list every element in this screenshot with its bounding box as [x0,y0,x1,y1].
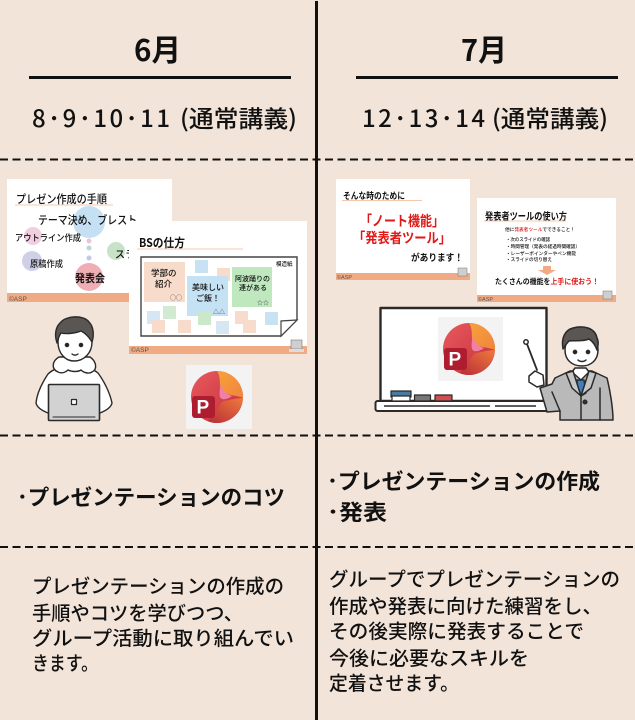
slide: brainstorming method: △△ [213,307,225,316]
illustration: presenter with pointer [524,327,613,420]
July description: グループでプレゼンテーションの [329,563,620,592]
slide: notes and presenter tools: 「ノート機能」 [360,211,444,231]
June topic: ･プレゼンテーションのコツ [17,481,285,512]
June description: 手順やコツを学びつつ、 [32,597,243,626]
slide: brainstorming method: ご飯！ [196,293,220,304]
slide: brainstorming method [129,221,307,354]
slide: presentation creation steps [7,179,172,303]
slide: notes and presenter tools: 「発表者ツール」 [353,228,451,248]
slide: how to use presenter tools: たくさんの機能を上手に使おう！ [495,276,599,287]
July description: 定着させます。 [329,667,459,696]
slide: how to use presenter tools: ©ASP [478,296,493,303]
slide: presentation creation steps: アウトライン作成 [15,231,81,244]
slide: how to use presenter tools: ・次のスライドの確認 [506,236,550,243]
icon: PowerPoint logo [186,365,252,429]
July description: 作成や発表に向けた練習をし、 [329,590,602,619]
slide: brainstorming method: ☆☆ [257,298,269,307]
June description: プレゼンテーションの作成の [32,570,284,599]
illustration: whiteboard [376,308,552,411]
July description: 今後に必要なスキルを [329,642,529,671]
slide: brainstorming method: 学部の [151,267,177,279]
June description: グループ活動に取り組んでい [32,622,294,651]
June description: きます。 [32,647,98,676]
slide: how to use presenter tools: ・スライドの切り替え [506,256,552,263]
slide: presentation creation steps: スラ [115,246,135,261]
slide: how to use presenter tools: 発表者ツールの使い方 [485,208,567,223]
heading: June: 6月 [134,26,181,70]
slide: how to use presenter tools [477,198,616,303]
slide: how to use presenter tools: ・時間管理（発表の経過時間確認） [506,243,580,250]
slide: brainstorming method: BSの仕方 [139,234,185,251]
heading: July [356,26,618,79]
slide: presentation creation steps: 発表会 [75,270,105,286]
slide: brainstorming method: ○○ [170,293,182,302]
June session numbers [32,99,297,134]
July description: その後実際に発表することで [329,615,584,644]
illustration: person at laptop [36,317,112,420]
July session numbers: (通常講義) [492,100,608,134]
slide: how to use presenter tools: ・レーザーポインターやペン機能 [506,250,576,257]
slide: notes and presenter tools: そんな時のために [343,189,405,202]
July topics [327,465,600,527]
June description [32,570,294,676]
icon: PowerPoint logo: P [196,398,210,418]
slide: notes and presenter tools [336,179,470,281]
column divider [315,1,318,720]
slide: presentation creation steps: 原稿作成 [30,257,63,270]
slide: brainstorming method: 紹介 [155,278,173,290]
slide: notes and presenter tools: があります！ [411,250,463,264]
slide: notes and presenter tools: ©ASP [337,274,352,281]
slide: presentation creation steps: プレゼン作成の手順 [16,191,107,207]
June session numbers: 8･9･10･11 [32,99,170,134]
slide: brainstorming method: 連がある [239,283,267,293]
slide: brainstorming method: 美味しい [192,282,224,293]
slide: presentation creation steps: テーマ決め、ブレスト [38,212,137,228]
icon: PowerPoint logo on whiteboard [438,317,503,381]
slide: how to use presenter tools: 他に発表者ツールでできること！ [505,226,575,233]
July session numbers: 12･13･14 [362,99,485,134]
slide: brainstorming method: 模造紙 [276,260,293,268]
icon: PowerPoint logo on whiteboard: P [448,350,462,370]
slide: brainstorming method: 阿波踊りの [235,274,270,284]
June session numbers: (通常講義) [180,100,297,134]
July session numbers [362,99,608,134]
July topics: ･発表 [327,496,388,527]
July description [329,563,620,696]
slide: presentation creation steps: ©ASP [9,295,27,303]
heading: July: 7月 [461,26,507,70]
heading: June [29,26,291,79]
slide: brainstorming method: ©ASP [131,346,149,354]
July topics: ･プレゼンテーションの作成 [327,465,600,496]
